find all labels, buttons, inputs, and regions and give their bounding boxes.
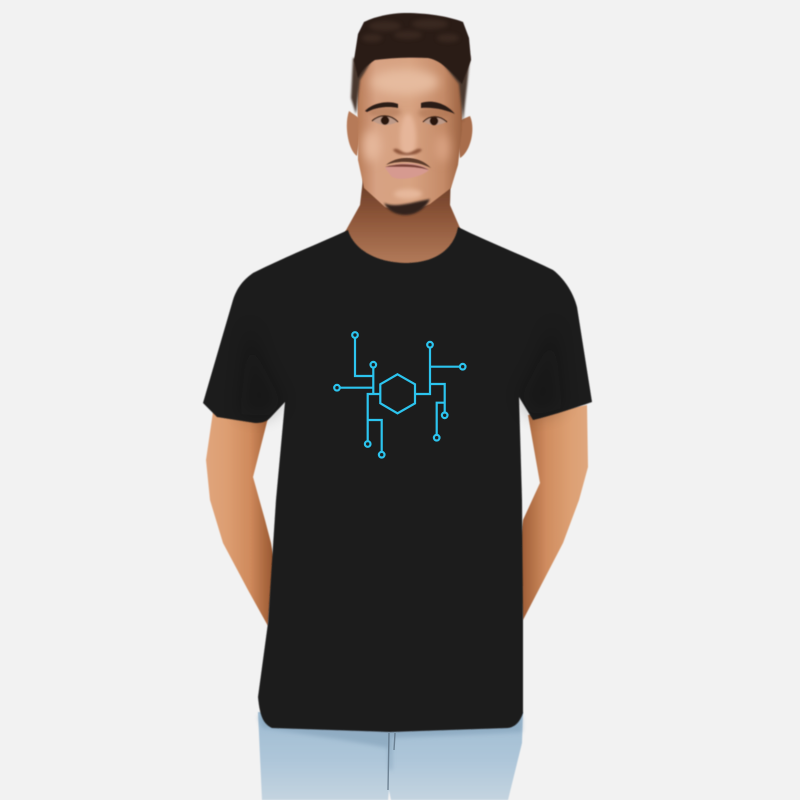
nose — [393, 149, 422, 155]
facial shading — [363, 69, 450, 199]
ears — [347, 111, 472, 158]
head — [347, 13, 472, 215]
jeans fly seam — [388, 733, 395, 790]
moustache and mouth — [385, 158, 431, 179]
product photo: man wearing circuit t-shirt — [202, 12, 593, 800]
jeans — [258, 712, 523, 800]
hair — [351, 13, 471, 122]
eyebrows — [365, 102, 455, 114]
left sleeve shading — [240, 320, 282, 416]
hair mass — [354, 13, 471, 84]
goatee — [384, 199, 430, 215]
right sleeve shading — [521, 320, 562, 416]
left traces — [340, 338, 382, 451]
hair side fade — [351, 56, 470, 122]
circuit end nodes — [334, 332, 466, 458]
right traces — [415, 348, 459, 434]
graphic: circuit print — [334, 332, 466, 458]
central hexagon — [380, 374, 415, 413]
hair curl highlights — [362, 19, 459, 42]
jeans shading — [258, 716, 522, 770]
eyes — [372, 116, 447, 125]
face — [357, 50, 463, 213]
neck — [345, 170, 462, 272]
t-shirt — [203, 227, 592, 732]
right arm — [518, 405, 588, 620]
left arm — [206, 412, 274, 626]
